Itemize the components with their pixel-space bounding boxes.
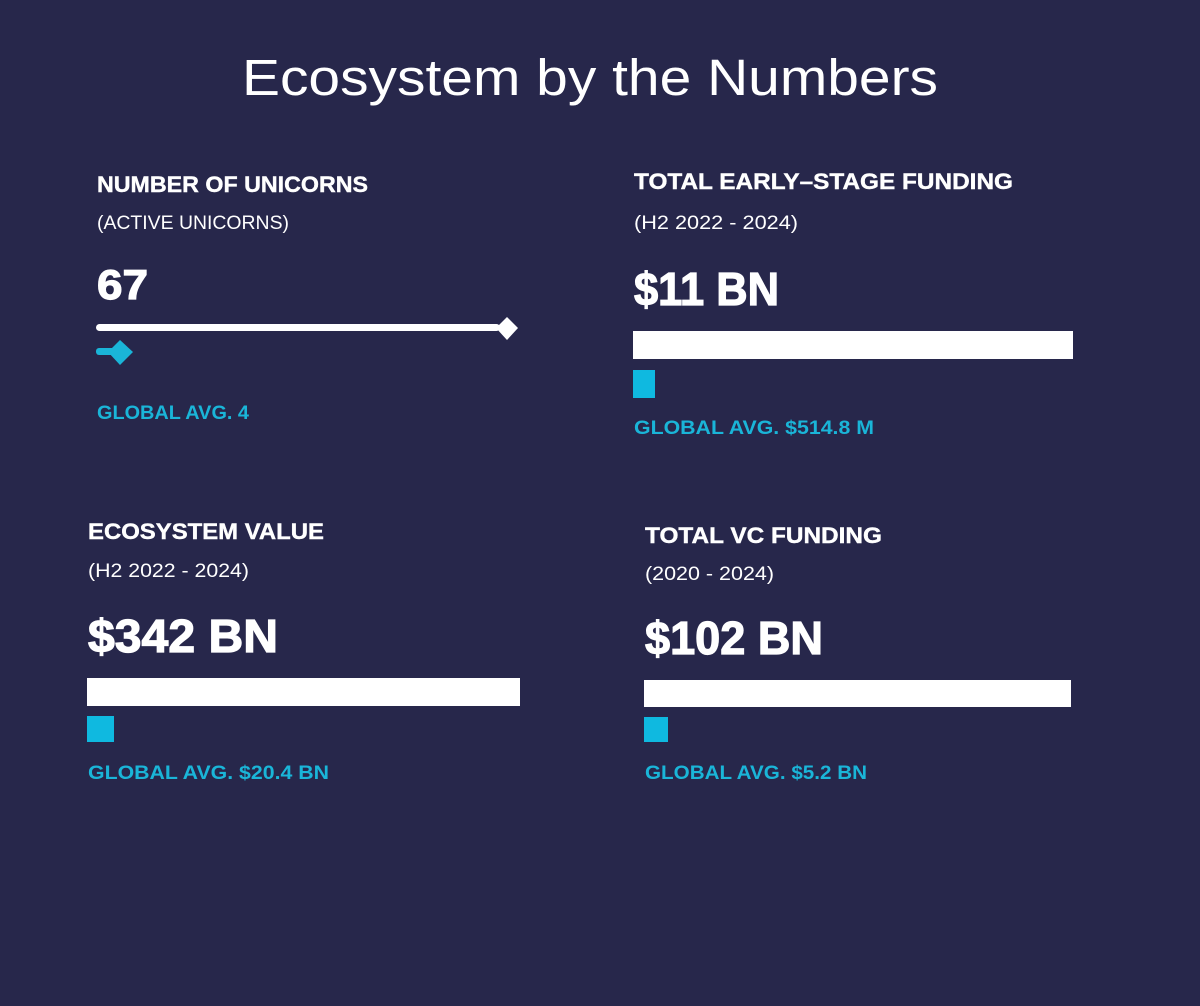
bar: unicorns ecosystem [96,317,518,340]
panel: total vc funding [644,523,1071,784]
subheading: active unicorns: (ACTIVE UNICORNS) [97,213,289,234]
bar: early-stage global average [633,370,655,398]
bar: vc ecosystem [644,680,1071,707]
global average label: GLOBAL AVG. $514.8 M [634,418,874,439]
global average label: GLOBAL AVG. $5.2 BN [645,763,867,784]
title: Ecosystem by the Numbers [242,49,938,106]
bar: value ecosystem [87,678,520,706]
heading: total vc funding: TOTAL VC FUNDING [645,523,882,548]
panel: total early-stage funding [633,169,1073,439]
subheading: H2 2022 - 2024: (H2 2022 - 2024) [88,561,249,582]
bar: vc global average [644,717,668,742]
heading: ecosystem value: ECOSYSTEM VALUE [88,519,324,544]
bar: early-stage ecosystem [633,331,1073,359]
panel: ecosystem value [87,519,520,784]
global average label: GLOBAL AVG. 4 [97,403,249,424]
subheading: H2 2022 - 2024: (H2 2022 - 2024) [634,213,798,234]
global average label: GLOBAL AVG. $20.4 BN [88,763,329,784]
value: $342 BN: $342 BN [88,610,278,662]
bar: unicorns global average [96,340,133,365]
heading: total early-stage funding: TOTAL EARLY–STAGE FUNDING [634,169,1013,194]
value: $11 BN: $11 BN [634,263,779,315]
heading: number of unicorns: NUMBER OF UNICORNS [97,172,368,197]
value: 67: 67 [97,261,148,308]
bar: value global average [87,716,114,742]
subheading: 2020 - 2024: (2020 - 2024) [645,564,774,585]
panel: number of unicorns [96,172,518,424]
value: $102 BN: $102 BN [645,612,823,664]
